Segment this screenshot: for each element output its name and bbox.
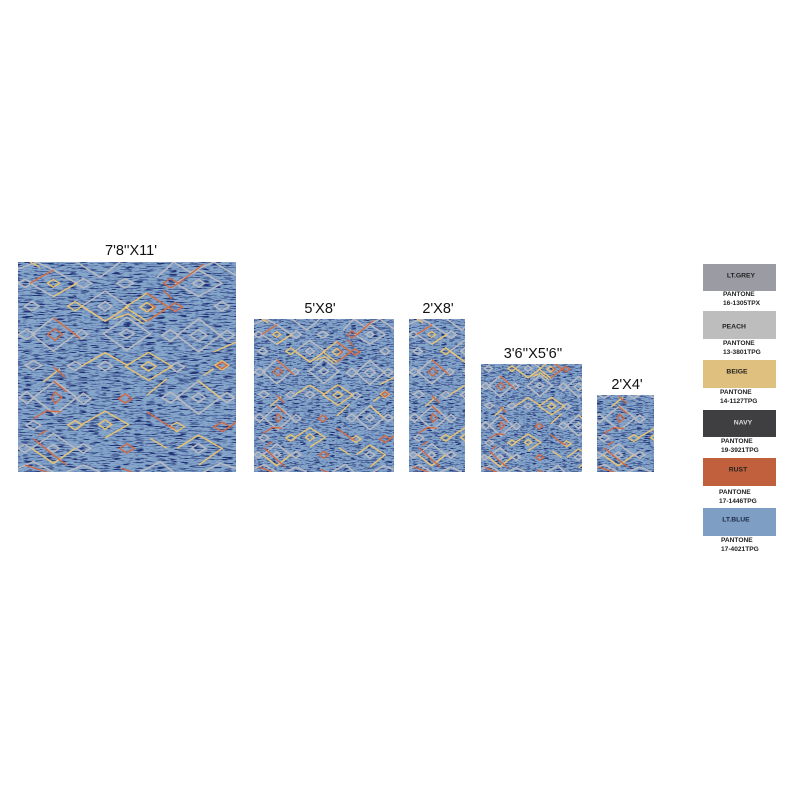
pantone code: light blue: 17-4021TPG bbox=[721, 546, 759, 553]
heading: 2'x8': 2'X8' bbox=[422, 301, 454, 317]
swatch: navy bbox=[703, 410, 776, 437]
swatch name: BEIGE bbox=[726, 368, 748, 376]
pantone code: light blue: PANTONE bbox=[721, 537, 753, 544]
swatch: light grey bbox=[703, 264, 776, 291]
pantone code: peach: 13-3801TPG bbox=[723, 349, 761, 356]
pantone code: light grey: PANTONE bbox=[723, 291, 755, 298]
rug size 3'6"x5'6" bbox=[481, 346, 582, 472]
rug size 5'x8' bbox=[254, 301, 394, 472]
swatch name: NAVY bbox=[734, 420, 752, 426]
swatch name: LT.BLUE bbox=[722, 516, 750, 524]
pantone code: rust: PANTONE bbox=[719, 489, 751, 496]
pantone code: beige: PANTONE bbox=[720, 389, 752, 396]
rug image bbox=[254, 319, 394, 472]
heading: 2'x4': 2'X4' bbox=[611, 377, 643, 393]
pantone code: rust: 17-1446TPG bbox=[719, 498, 757, 505]
swatch: light blue bbox=[703, 508, 776, 536]
swatch: beige bbox=[703, 360, 776, 388]
swatch name: PEACH bbox=[722, 324, 746, 330]
swatch name: LT.GREY bbox=[727, 272, 755, 280]
rug size 2'x4' bbox=[597, 377, 654, 472]
rug image bbox=[597, 395, 654, 472]
pantone code: light grey: 16-1305TPX bbox=[723, 300, 760, 307]
pantone code: peach: PANTONE bbox=[723, 340, 755, 347]
heading: 7'8"x11': 7'8''X11' bbox=[105, 243, 157, 259]
heading: 5'x8': 5'X8' bbox=[304, 301, 336, 317]
pantone code: beige bbox=[720, 389, 757, 405]
pantone code: navy bbox=[721, 438, 759, 454]
swatch name: RUST bbox=[729, 466, 747, 474]
pantone code: beige: 14-1127TPG bbox=[720, 398, 757, 405]
rug size 7'8"x11' bbox=[18, 243, 236, 472]
pantone code: light blue bbox=[721, 537, 759, 553]
rug image bbox=[481, 364, 582, 472]
swatch: peach bbox=[703, 311, 776, 339]
swatch: rust bbox=[703, 458, 776, 486]
heading: 3'6"x5'6": 3'6''X5'6'' bbox=[504, 346, 562, 362]
rug image bbox=[18, 262, 236, 472]
rug image bbox=[409, 319, 465, 472]
pantone code: light grey bbox=[723, 291, 760, 307]
rug size 2'x8' bbox=[409, 301, 465, 472]
pantone code: rust bbox=[719, 489, 757, 505]
pantone code: navy: PANTONE bbox=[721, 438, 753, 445]
pantone code: peach bbox=[723, 340, 761, 356]
pantone code: navy: 19-3921TPG bbox=[721, 447, 759, 454]
